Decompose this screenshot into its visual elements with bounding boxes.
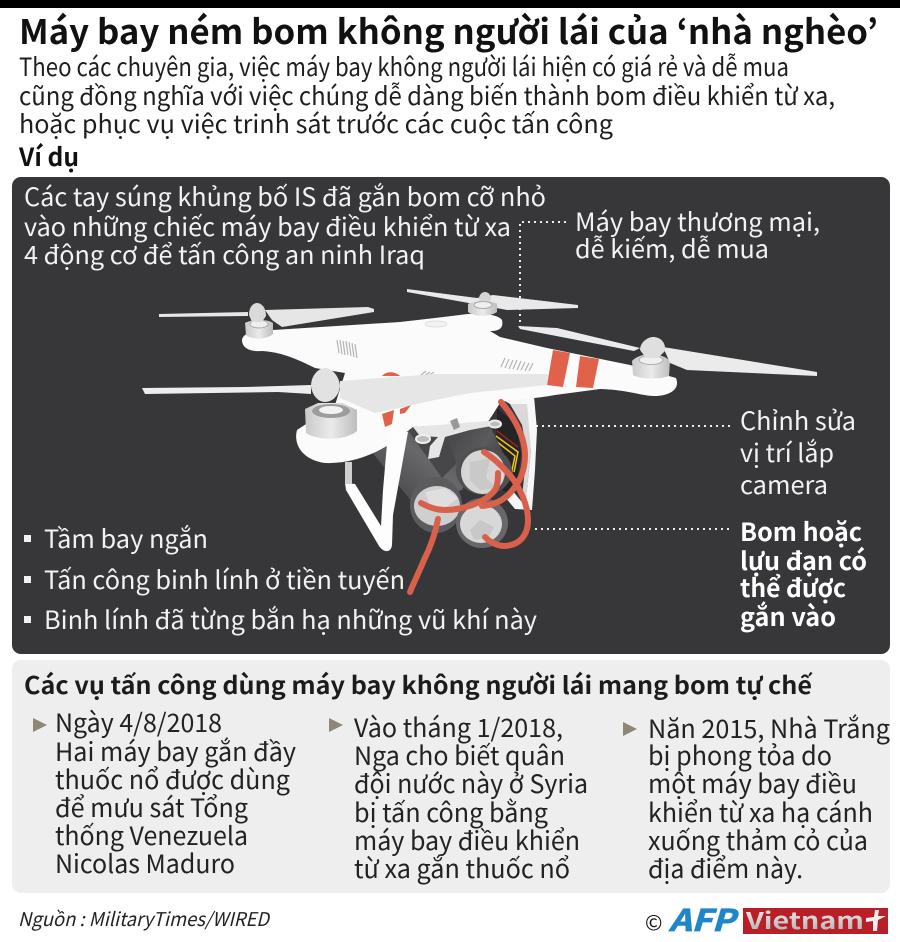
callout: commercial drone: Máy bay thương mại, bbox=[575, 203, 820, 239]
column: Syria bbox=[329, 708, 588, 886]
panel: attacks bbox=[12, 660, 891, 893]
credit: Vietnam+ logo: Vietnam bbox=[745, 902, 864, 936]
column: Venezuela: thuốc nổ được dùng bbox=[55, 760, 291, 797]
red fuse wires bbox=[410, 402, 528, 592]
callout: bomb: thể được bbox=[740, 569, 846, 605]
title: Máy bay ném bom không người lái của ‘nhà nghèo’ bbox=[19, 5, 878, 54]
callout: camera mount: vị trí lắp bbox=[740, 434, 834, 470]
dark gap behind wires bbox=[495, 408, 521, 493]
column: Venezuela: thống Venezuela bbox=[55, 816, 248, 853]
intro text: 4 động cơ để tấn công an ninh Iraq bbox=[24, 236, 425, 272]
source: Nguồn : MilitaryTimes/WIRED bbox=[18, 905, 271, 932]
column: Syria: Nga cho biết quân bbox=[354, 736, 565, 773]
column: Venezuela: Hai máy bay gắn đầy bbox=[55, 732, 296, 769]
callout: bomb: gắn vào bbox=[740, 598, 836, 634]
callout: bomb: lựu đạn có bbox=[740, 542, 867, 578]
drone body bbox=[242, 314, 677, 463]
credit: AFP logo: AFP bbox=[668, 896, 740, 940]
column: Venezuela bbox=[33, 703, 296, 881]
column: Syria: từ xa gắn thuốc nổ bbox=[354, 849, 570, 886]
top-left propeller bbox=[159, 303, 374, 327]
camera mount bbox=[413, 418, 502, 459]
callout: camera mount: Chỉnh sửa bbox=[740, 402, 856, 438]
credit: Vietnam+ logo bbox=[743, 902, 888, 936]
column: Syria: Vào tháng 1/2018, bbox=[354, 708, 563, 745]
back propeller bbox=[407, 289, 578, 310]
wires yellow bbox=[496, 431, 518, 475]
column: White House: địa điểm này. bbox=[648, 849, 803, 886]
column: Syria: bị tấn công bằng bbox=[354, 793, 549, 830]
right propeller bbox=[518, 326, 817, 376]
subtitle text block: cũng đồng nghĩa với việc chúng dễ dàng biến thành bom điều khiển từ xa, bbox=[19, 77, 835, 113]
intro text bbox=[24, 178, 546, 272]
column: Syria: máy bay điều khiển bbox=[354, 821, 580, 858]
panel: drone example bbox=[12, 177, 890, 654]
callout: camera mount bbox=[500, 402, 856, 502]
column: White House: Năn 2015, Nhà Trắng bbox=[648, 709, 891, 746]
column: Venezuela: Nicolas Maduro bbox=[55, 844, 235, 881]
column: White House: khiển từ xa hạ cánh bbox=[648, 793, 873, 830]
bomb tubes bbox=[368, 420, 512, 548]
subtitle text block: hoặc phục vụ việc trinh sát trước các cuộc tấn công bbox=[19, 105, 613, 141]
credit: AFP logo: © bbox=[645, 907, 662, 937]
callout: bomb bbox=[535, 513, 867, 634]
subtitle text block bbox=[19, 48, 835, 141]
column: White House bbox=[623, 709, 891, 886]
drone illustration bbox=[142, 289, 817, 592]
bullet list: Binh lính đã từng bắn hạ những vũ khí này bbox=[44, 601, 537, 637]
column: Venezuela: Ngày 4/8/2018 bbox=[55, 703, 222, 740]
column: White House: xuống thảm cỏ của bbox=[648, 821, 868, 858]
left landing leg bbox=[345, 432, 408, 551]
column: White House: bị phong tỏa do bbox=[648, 736, 832, 773]
subtitle text block: Theo các chuyên gia, việc máy bay không người lái hiện có giá rẻ và dễ mua bbox=[19, 48, 789, 84]
intro text: Các tay súng khủng bố IS đã gắn bom cỡ nhỏ bbox=[24, 178, 546, 214]
callout: bomb: Bom hoặc bbox=[740, 513, 862, 549]
right landing leg bbox=[500, 396, 537, 510]
red stripes bbox=[382, 350, 599, 427]
bullet list: Tầm bay ngắn bbox=[44, 520, 208, 556]
column: Venezuela: để mưu sát Tổng bbox=[55, 788, 249, 825]
attacks heading: Các vụ tấn công dùng máy bay không người lái mang bom tự chế bbox=[24, 666, 813, 701]
credit: AFP logo bbox=[645, 896, 740, 940]
intro text: vào những chiếc máy bay điều khiển từ xa bbox=[24, 208, 511, 244]
heading: example: Ví dụ bbox=[18, 138, 79, 174]
bullet list: Tấn công binh lính ở tiền tuyến bbox=[44, 561, 405, 597]
callout: camera mount: camera bbox=[740, 466, 828, 502]
motors bbox=[245, 301, 670, 379]
column: White House: một máy bay điều bbox=[648, 764, 857, 801]
callout: commercial drone: dễ kiếm, dễ mua bbox=[575, 230, 769, 266]
front propeller and motor bbox=[142, 368, 548, 439]
callout: commercial drone bbox=[520, 203, 820, 328]
bullet list bbox=[24, 520, 537, 637]
body vents bbox=[337, 340, 533, 376]
column: Syria: đội nước này ở Syria bbox=[354, 764, 588, 801]
